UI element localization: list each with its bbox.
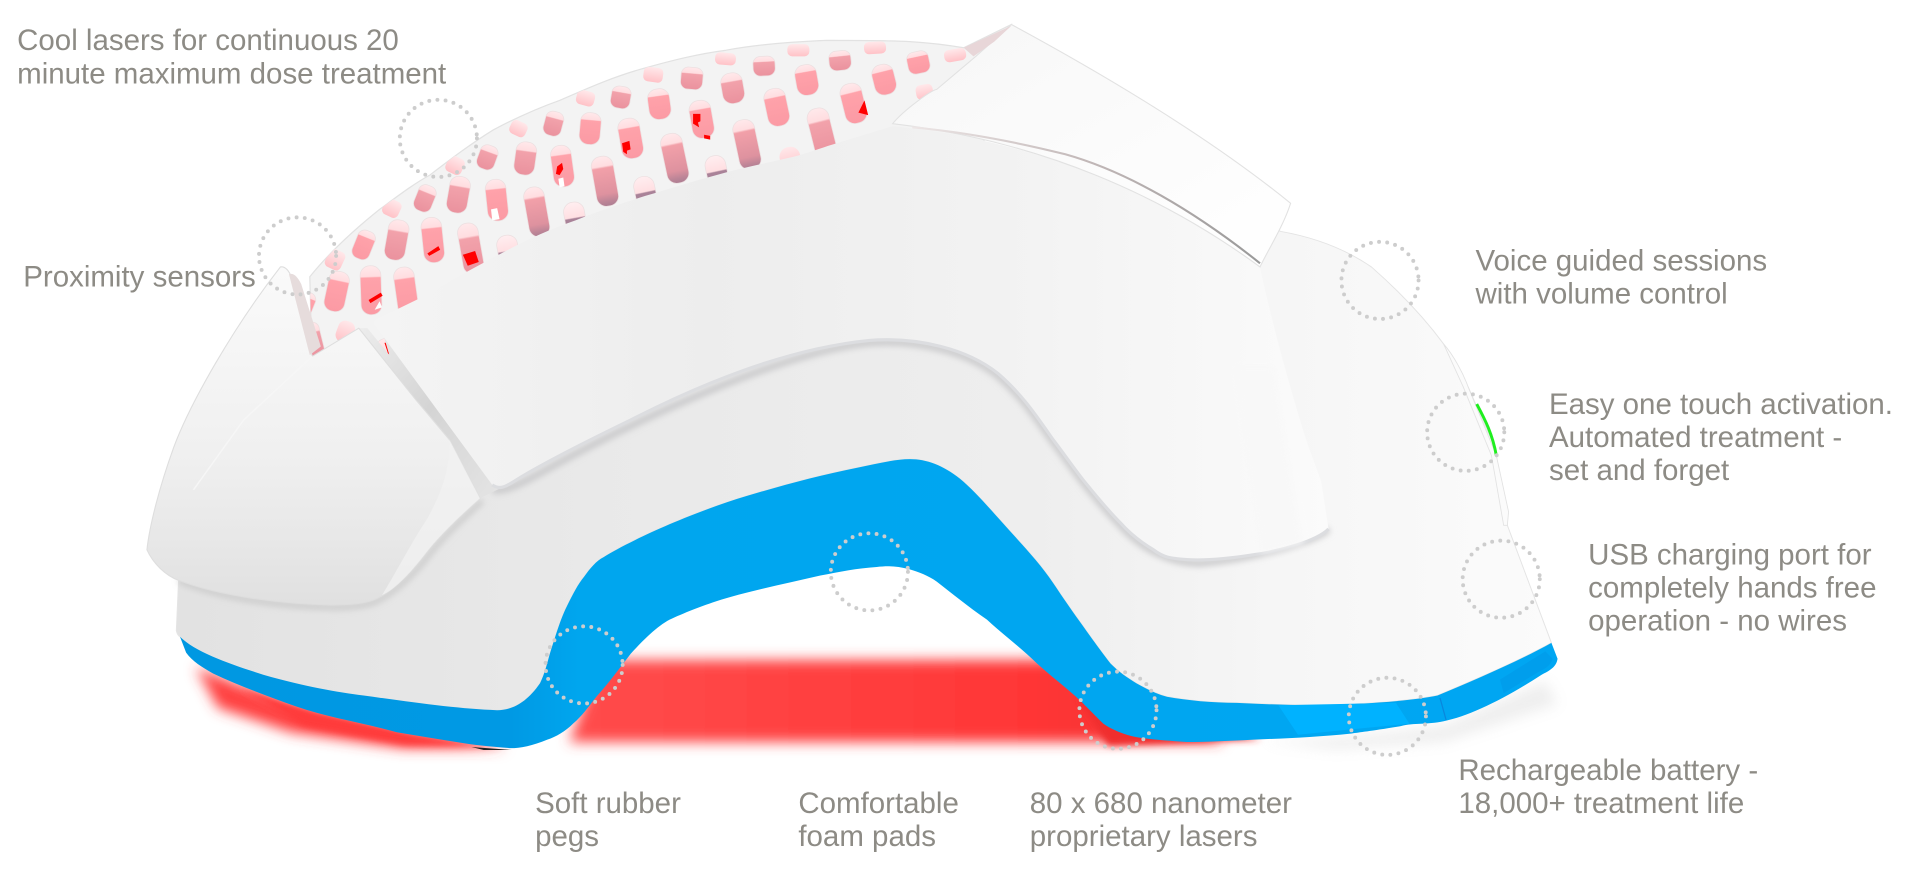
marker: voice guided sessions (1341, 242, 1419, 319)
red laser glow (196, 660, 1558, 750)
marker: rechargeable battery (1349, 678, 1426, 755)
rim right shade (1500, 651, 1553, 693)
cap wedge (964, 26, 1011, 56)
central shell panel (373, 126, 1329, 560)
label: rechargeable battery: Rechargeable battery - (1458, 754, 1758, 787)
label: rubber pegs: Soft rubber (535, 787, 681, 820)
marker: proximity sensors (259, 217, 336, 294)
blue foam pad and rim (180, 459, 1558, 748)
helmet body (176, 208, 1551, 710)
label: proprietary lasers: 80 x 680 nanometer (1030, 787, 1292, 820)
side button (1444, 344, 1509, 525)
marker: USB charging port (1463, 541, 1540, 618)
label: voice guided sessions: with volume control (1475, 278, 1728, 311)
panel shadow (492, 342, 1329, 563)
laser diode glints (369, 100, 868, 354)
laser slots (310, 42, 966, 356)
label: cool lasers: minute maximum dose treatment (17, 57, 446, 90)
front cap shell (893, 24, 1291, 267)
label: foam pads: foam pads (798, 820, 936, 853)
marker: proprietary lasers (1079, 672, 1157, 749)
icon: green status light (1477, 404, 1496, 456)
cap shadow (179, 501, 482, 607)
rear cap shell (147, 267, 480, 605)
groove line (912, 127, 1260, 263)
label: USB charging: operation - no wires (1588, 605, 1847, 638)
label: one touch activation: Automated treatment - (1549, 421, 1842, 454)
marker: foam pads (831, 533, 908, 610)
panel lip (492, 340, 1329, 560)
label: cool lasers: Cool lasers for continuous 20 (17, 24, 399, 57)
cap fold (289, 274, 321, 355)
shell gap (359, 318, 500, 498)
perforated laser band (309, 24, 1012, 356)
label: one touch activation: set and forget (1549, 454, 1729, 487)
label: voice guided sessions: Voice guided sessions (1476, 245, 1767, 278)
label: USB charging: USB charging port for (1588, 538, 1872, 571)
label: foam pads: Comfortable (798, 787, 959, 820)
label: one touch activation: Easy one touch activation. (1549, 388, 1893, 421)
marker: rubber pegs (546, 626, 623, 703)
label: proximity sensors: Proximity sensors (23, 261, 256, 294)
marker: one touch activation (1427, 394, 1504, 471)
label: USB charging: completely hands free (1588, 572, 1876, 605)
marker: cool lasers (400, 100, 477, 177)
label: rubber pegs: pegs (535, 820, 599, 853)
cap facet (382, 440, 480, 595)
label: rechargeable battery: 18,000+ treatment life (1458, 787, 1744, 820)
label: proprietary lasers: proprietary lasers (1030, 820, 1257, 853)
rim seam (1440, 698, 1446, 720)
panel highlight (1237, 367, 1304, 553)
rim highlight (1278, 703, 1409, 735)
